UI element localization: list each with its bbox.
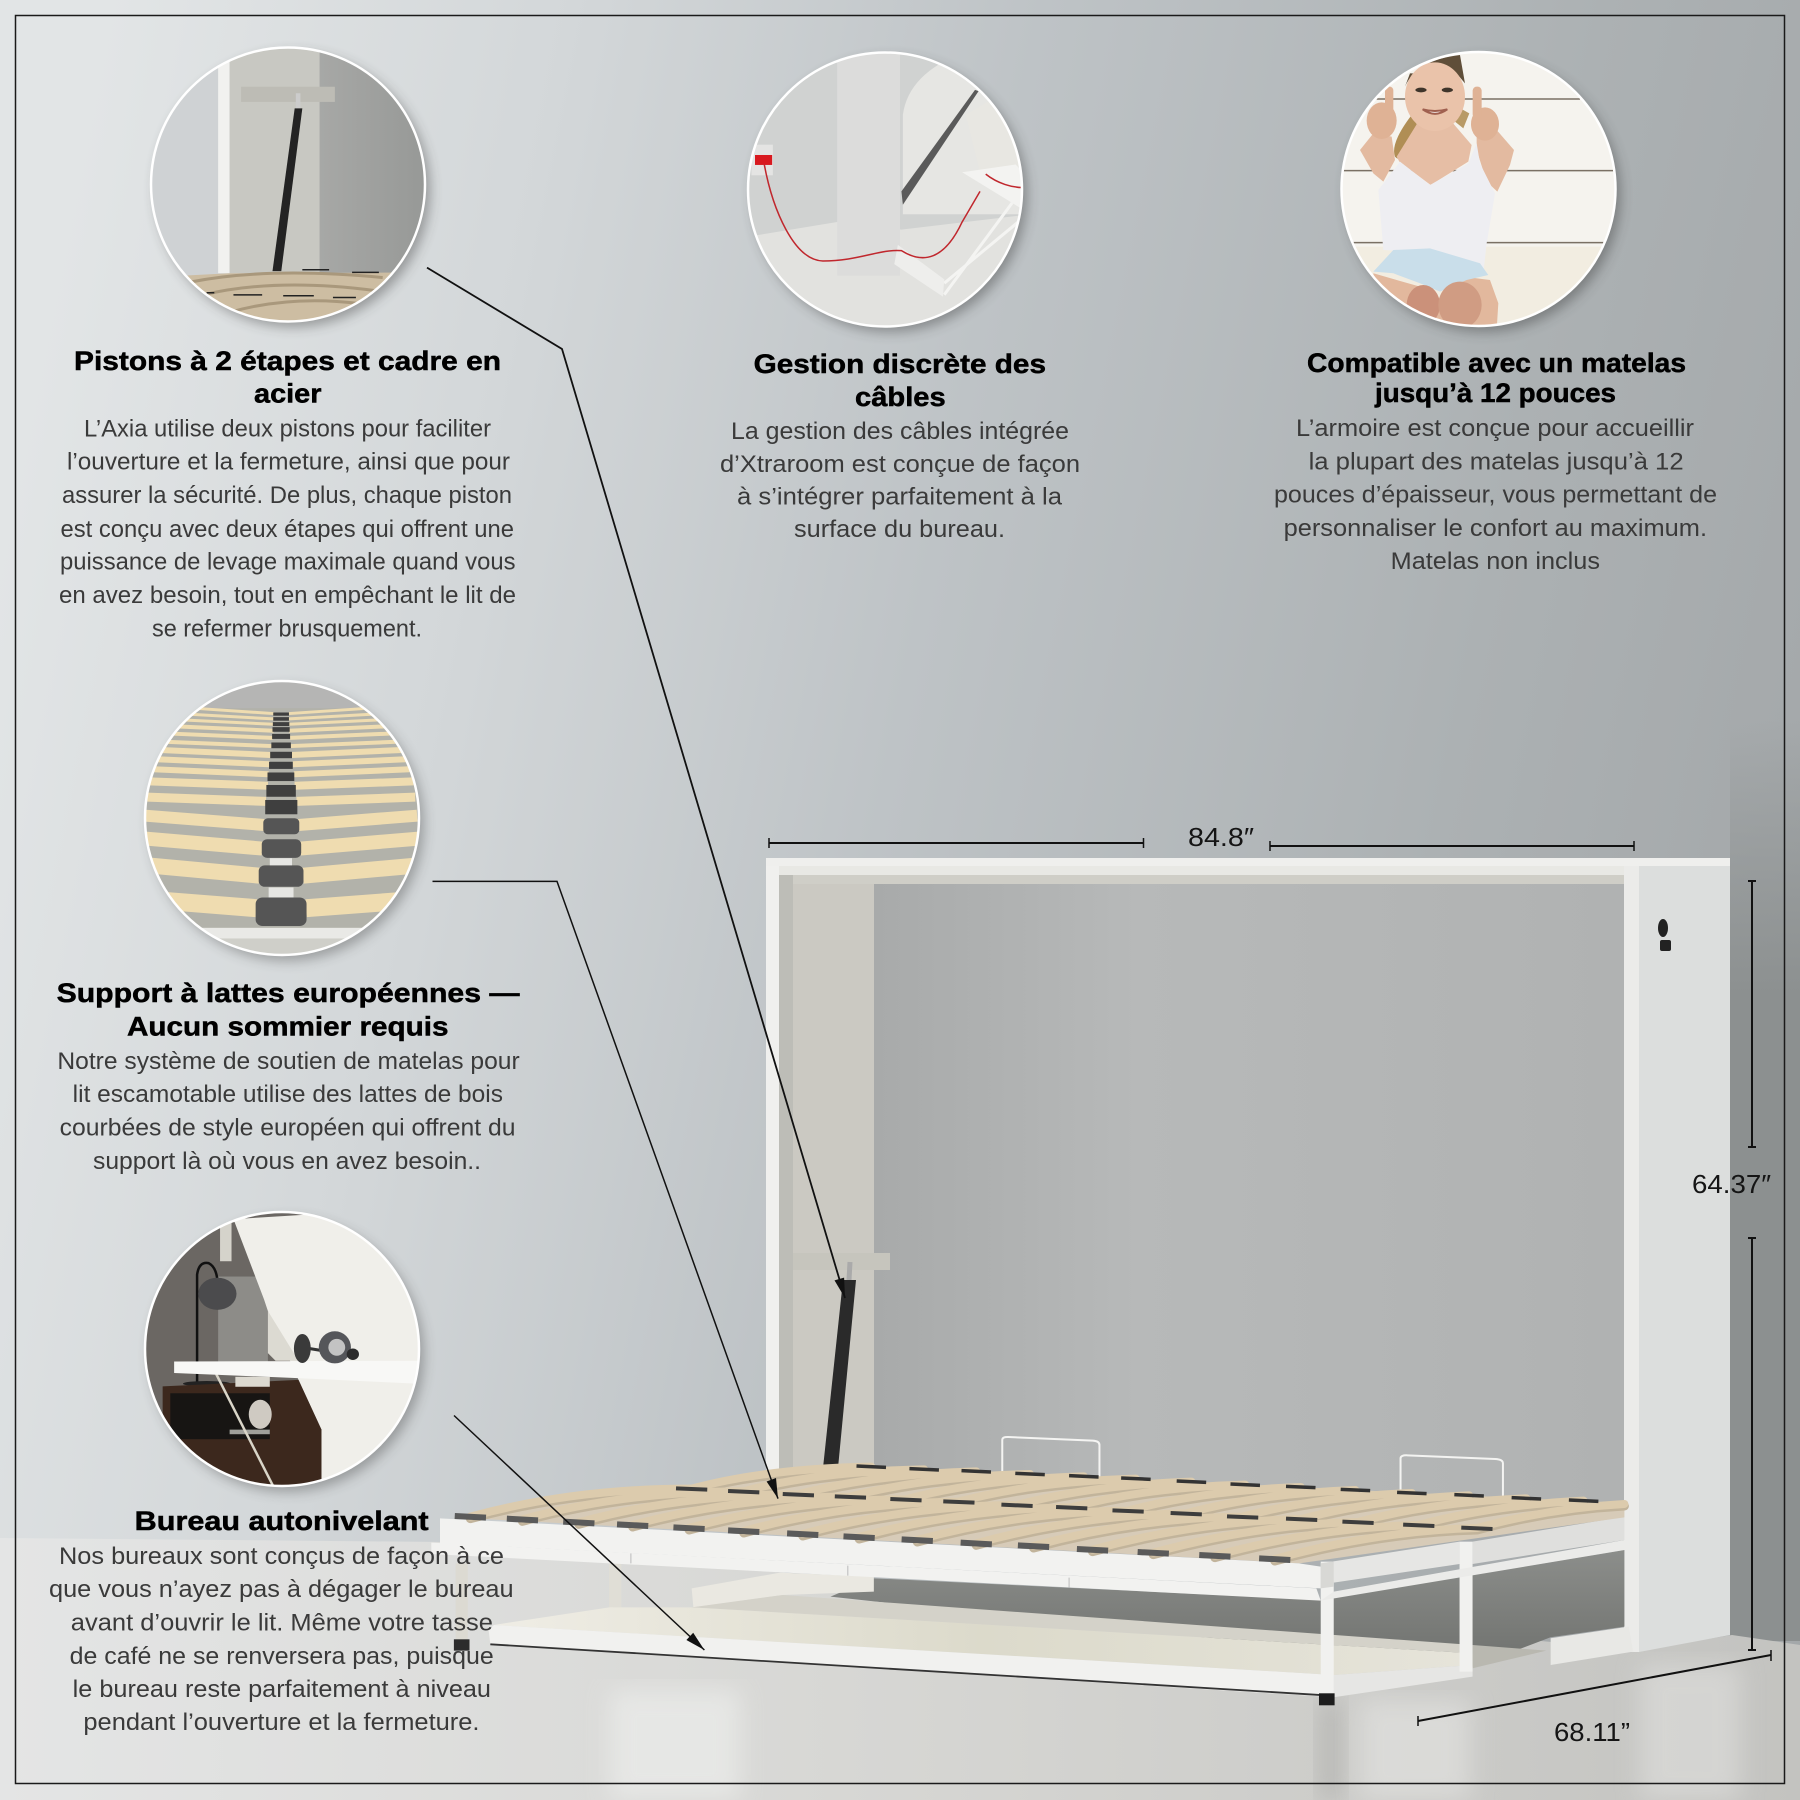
body text: l’ouverture et la fermeture, ainsi que pour — [67, 449, 510, 476]
panel: cable management — [720, 50, 1080, 543]
shorts — [1373, 248, 1488, 292]
photo: piston close-up — [145, 39, 432, 330]
body text: à s’intégrer parfaitement à la — [737, 483, 1063, 510]
frame clamp — [1321, 1561, 1334, 1588]
dimension: depth 68.11 inches — [1418, 1650, 1771, 1747]
panel: pistons — [59, 39, 516, 643]
heading: Aucun sommier requis — [127, 1012, 448, 1042]
top — [1382, 144, 1492, 268]
heading: Pistons à 2 étapes et cadre en — [74, 346, 501, 376]
body text — [57, 1048, 520, 1175]
body text: Nos bureaux sont conçus de façon à ce — [59, 1543, 504, 1570]
photo: cable management — [744, 50, 1030, 332]
body text: lit escamotable utilise des lattes de bois — [73, 1081, 503, 1108]
arrow: slats callout — [432, 881, 778, 1499]
dimension: height 64.37 inches — [1692, 881, 1771, 1650]
body text: surface du bureau. — [794, 516, 1005, 543]
body text: la plupart des matelas jusqu’à 12 — [1309, 449, 1684, 476]
right desk support — [1551, 1627, 1633, 1665]
slat end caps — [455, 1466, 1598, 1560]
head handles — [1002, 1437, 1503, 1497]
desk hinge panel — [692, 1573, 874, 1607]
body text: Notre système de soutien de matelas pour — [57, 1048, 520, 1075]
body text: avant d’ouvrir le lit. Même votre tasse — [71, 1610, 493, 1636]
background: floor — [0, 1538, 1800, 1800]
side rails — [1321, 1542, 1460, 1583]
arrow: desk callout — [454, 1416, 704, 1650]
body text — [1274, 415, 1717, 575]
front legs — [1319, 1542, 1473, 1705]
body text: assurer la sécurité. De plus, chaque piston — [62, 482, 512, 509]
lower rail — [431, 1543, 1321, 1601]
heading — [754, 349, 1046, 412]
body text: support là où vous en avez besoin.. — [93, 1148, 481, 1175]
body text: pendant l’ouverture et la fermeture. — [83, 1709, 480, 1736]
panel: mattress compatibility — [1274, 50, 1717, 575]
slat bed surface — [453, 1465, 1624, 1563]
body text: Matelas non inclus — [1391, 548, 1600, 575]
heading: câbles — [855, 382, 946, 412]
heading: Bureau autonivelant — [135, 1506, 429, 1536]
wooden slats — [470, 1467, 1624, 1561]
photo: woman on mattress — [1340, 50, 1620, 332]
far left legs — [454, 1562, 621, 1651]
body text: courbées de style européen qui offrent du — [60, 1115, 515, 1142]
heading: acier — [254, 378, 322, 408]
body text: L’armoire est conçue pour accueillir — [1296, 415, 1694, 442]
photo: slats close-up — [142, 678, 425, 961]
body text: personnaliser le confort au maximum. — [1284, 515, 1707, 542]
arms — [1360, 133, 1395, 182]
heading — [74, 346, 501, 408]
heading: Gestion discrète des — [754, 349, 1046, 379]
nightstand — [163, 1380, 321, 1491]
body text: que vous n’ayez pas à dégager le bureau — [49, 1576, 514, 1603]
heading: Compatible avec un matelas — [1307, 348, 1686, 378]
body text: La gestion des câbles intégrée — [731, 418, 1069, 445]
face — [1405, 62, 1465, 131]
self-levelling desk — [489, 1607, 1473, 1697]
neck and chest — [1397, 122, 1472, 185]
body text: est conçu avec deux étapes qui offrent une — [60, 516, 514, 543]
photo: desk close-up — [142, 1208, 425, 1492]
cabinet lock — [1658, 919, 1671, 951]
body text — [49, 1543, 514, 1736]
dimension: height 64.37 inches: 64.37″ — [1692, 1169, 1771, 1199]
body text: L’Axia utilise deux pistons pour faciliter — [84, 416, 491, 443]
legs — [1373, 273, 1498, 330]
body text: puissance de levage maximale quand vous — [60, 548, 516, 576]
body text: se refermer brusquement. — [152, 616, 422, 643]
feet — [1406, 285, 1439, 318]
heading: Support à lattes européennes — — [57, 978, 520, 1008]
heading: jusqu’à 12 pouces — [1374, 378, 1616, 408]
bed, desk and frame — [431, 1437, 1633, 1705]
under-bed shadow area — [830, 1550, 1624, 1667]
thumbs — [1367, 87, 1499, 141]
heading — [57, 978, 520, 1042]
hair — [1405, 55, 1465, 87]
heading — [1307, 348, 1686, 408]
body text — [59, 416, 516, 643]
body text: le bureau reste parfaitement à niveau — [73, 1676, 491, 1703]
headphones — [294, 1331, 359, 1363]
panel: european slats — [57, 678, 520, 1175]
dimension: width 84.8 inches: 84.8″ — [1188, 822, 1254, 852]
body text: pouces d’épaisseur, vous permettant de — [1274, 482, 1717, 508]
body text: en avez besoin, tout en empêchant le lit de — [59, 582, 516, 609]
piston bracket — [793, 1253, 890, 1270]
murphy bed cabinet — [766, 858, 1730, 1652]
body text: de café ne se renversera pas, puisque — [70, 1643, 494, 1670]
body text — [720, 418, 1080, 543]
arrow: piston callout — [427, 268, 845, 1298]
back desk bar — [692, 1595, 1473, 1653]
body text: d’Xtraroom est conçue de façon — [720, 451, 1080, 478]
background: wall shadow right of cabinet — [1730, 720, 1800, 1641]
dimension: width 84.8 inches — [769, 822, 1634, 852]
dimension: depth 68.11 inches: 68.11” — [1554, 1717, 1630, 1747]
front rail — [440, 1518, 1321, 1588]
gas piston — [823, 1262, 856, 1468]
panel: self-levelling desk — [49, 1208, 514, 1736]
white desk top — [174, 1361, 421, 1384]
desk lamp — [183, 1263, 237, 1386]
